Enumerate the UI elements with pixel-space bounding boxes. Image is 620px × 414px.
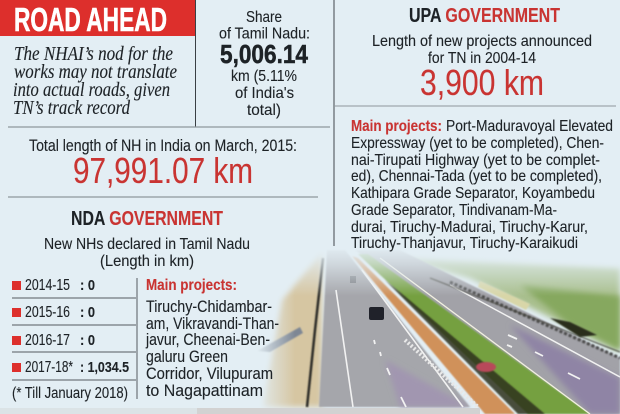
UPA subheading: for TN in 2004-14: [428, 50, 536, 67]
road edge lines: [336, 290, 353, 407]
car: [369, 307, 384, 320]
NDA main projects: javur, Cheenai-Ben-: [145, 331, 270, 349]
bottom strip: [0, 408, 197, 414]
NDA main projects: Corridor, Vilupuram: [146, 365, 273, 383]
NDA yearly table: : 1,034.5: [80, 359, 129, 376]
orange median strip: [352, 256, 515, 414]
share of Tamil Nadu: of Tamil Nadu:: [219, 26, 310, 42]
NDA main projects: am, Vikravandi-Than-: [146, 315, 279, 333]
NDA subheading: (Length in km): [100, 253, 194, 270]
intro text: into actual roads, given: [13, 80, 170, 101]
total length of NH: [29, 137, 297, 191]
NDA yearly table: [12, 277, 136, 402]
share of Tamil Nadu: km (5.11%: [231, 68, 297, 85]
central crash barrier: [405, 340, 478, 407]
right greenery: [400, 258, 620, 352]
title banner: ROAD AHEAD: ROAD AHEAD: [14, 1, 167, 38]
total length of NH: Total length of NH in India on March, 2015:: [29, 137, 297, 155]
UPA figure: 3,900 km: [420, 62, 544, 103]
NDA yearly table: 2016-17: [25, 332, 70, 349]
NDA yearly table: 2014-15: [25, 277, 70, 294]
NDA main projects: Main projects:: [146, 277, 237, 294]
UPA heading: UPA GOVERNMENT: [409, 5, 560, 27]
photo: highway: [255, 246, 620, 414]
total length of NH: 97,991.07 km: [73, 150, 253, 191]
NDA yearly table: (* Till January 2018): [12, 385, 128, 402]
intro text: [13, 44, 177, 119]
UPA subheading: [372, 33, 592, 67]
NDA yearly table: : 0: [80, 304, 95, 321]
NDA subheading: New NHs declared in Tamil Nadu: [44, 236, 250, 253]
right carriageway: [355, 250, 620, 414]
rules: [194, 0, 196, 127]
NDA yearly table: 2017-18*: [25, 359, 73, 376]
UPA main projects: Tiruchy-Thanjavur, Tiruchy-Karaikudi: [351, 235, 578, 252]
left verge: [262, 252, 322, 407]
NDA main projects: galuru Green: [146, 348, 228, 366]
NDA yearly table: : 0: [80, 332, 95, 349]
share of Tamil Nadu: [219, 9, 310, 119]
top fade: [255, 246, 620, 296]
UPA main projects: [351, 118, 613, 252]
lane dashes: [374, 335, 580, 407]
NDA yearly table: : 0: [80, 277, 95, 294]
NDA main projects: to Nagapattinam: [146, 382, 263, 400]
intro text: works may not translate: [14, 62, 177, 83]
NDA subheading: [44, 236, 250, 270]
share of Tamil Nadu: Share: [246, 9, 282, 26]
share of Tamil Nadu: total): [247, 102, 281, 119]
NDA main projects: Tiruchy-Chidambar-: [146, 298, 272, 316]
left carriageway: [319, 250, 470, 407]
NDA heading: NDA GOVERNMENT: [71, 208, 223, 230]
left dark barrier: [307, 258, 323, 407]
green median: [358, 254, 590, 414]
intro text: The NHAI’s nod for the: [14, 44, 173, 65]
share of Tamil Nadu: 5,006.14: [220, 39, 308, 69]
NDA yearly table: 2015-16: [25, 304, 70, 321]
intro text: TN’s track record: [13, 98, 130, 119]
UPA subheading: Length of new projects announced: [372, 33, 592, 50]
share of Tamil Nadu: of India's: [235, 85, 294, 102]
UPA main projects: Grade Separator, Tindivanam-Ma-: [351, 202, 557, 219]
right crash barrier: [450, 282, 620, 358]
UPA main projects: Main projects:: [351, 118, 442, 135]
NDA main projects: [145, 277, 279, 400]
UPA main projects: durai, Tiruchy-Madurai, Tiruchy-Karur,: [351, 219, 588, 236]
